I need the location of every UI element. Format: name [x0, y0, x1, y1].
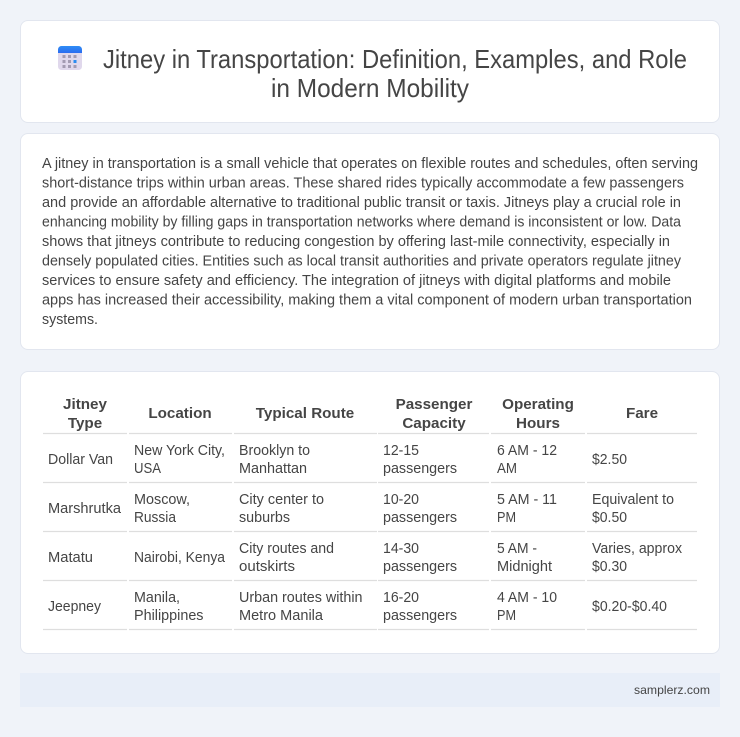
table row: Jeepney: Philippines [134, 608, 204, 624]
table row: Dollar Van: 6 AM - 12 [497, 443, 557, 459]
text block: description: enhancing mobility by filling gaps in transportation networks where demand is inconsistent or low. Data [42, 214, 681, 230]
table header row: Capacity [402, 415, 466, 432]
table row: Dollar Van: passengers [383, 461, 457, 477]
table row: Dollar Van: USA [134, 461, 161, 477]
table header row: Operating [502, 396, 574, 413]
text block: description: short-distance trips within urban areas. These shared rides typically accommodate a few passengers [42, 176, 684, 192]
table row: Jeepney: Metro Manila [239, 608, 323, 624]
table row: Dollar Van: 12-15 [383, 443, 419, 459]
table row: Jeepney: Jeepney [48, 599, 102, 615]
table row: Jeepney: passengers [383, 608, 457, 624]
table row: Dollar Van: $2.50 [592, 452, 627, 468]
icon: calendar [58, 46, 82, 70]
table header row: Location [148, 405, 212, 422]
table header row: Jitney [63, 396, 107, 413]
text block: description: A jitney in transportation is a small vehicle that operates on flexible routes and schedules, often serving [42, 156, 698, 172]
table row: Jeepney: Urban routes within [239, 590, 362, 606]
table header row: Fare [626, 405, 658, 422]
table row: Matatu: passengers [383, 559, 457, 575]
table row: Dollar Van: New York City, [134, 443, 225, 459]
table row: Jeepney: Manila, [134, 590, 180, 606]
table row: Jeepney: 16-20 [383, 590, 419, 606]
table header row: Typical Route [256, 405, 354, 422]
table row: Dollar Van [48, 443, 627, 477]
table header row: Hours [516, 415, 560, 432]
table row: Marshrutka: City center to [239, 492, 324, 508]
table row: Matatu: Midnight [497, 559, 552, 575]
table row: Marshrutka: Russia [134, 510, 176, 526]
table row: Matatu: outskirts [239, 559, 295, 575]
text block: description: services to ensure safety and efficiency. The integration of jitneys with digital platforms and mobile [42, 273, 671, 289]
table row dividers [43, 434, 697, 630]
table row: Marshrutka: Equivalent to [592, 492, 674, 508]
table row: Marshrutka: $0.50 [592, 510, 627, 526]
text block: description: densely populated cities. Entities such as local transit authorities and private operators regulate jitney [42, 254, 682, 270]
table row: Matatu: Varies, approx [592, 541, 683, 557]
table row: Dollar Van: Manhattan [239, 461, 307, 477]
text block: description: shows that jitneys contribute to reducing congestion by offering last-mile connectivity, especially in [42, 234, 670, 250]
table row: Jeepney [48, 590, 667, 624]
table row: Matatu: City routes and [239, 541, 334, 557]
table row: Marshrutka: PM [497, 510, 516, 526]
panel: title card [20, 20, 720, 123]
table row: Jeepney: $0.20-$0.40 [592, 599, 667, 615]
table row: Marshrutka: Moscow, [134, 492, 190, 508]
table row: Dollar Van: AM [497, 461, 517, 477]
title: in Modern Mobility [271, 75, 469, 103]
table row: Marshrutka: passengers [383, 510, 457, 526]
table row: Marshrutka: 10-20 [383, 492, 419, 508]
table row: Marshrutka [48, 492, 674, 526]
panel: description card [20, 133, 720, 350]
footer credit: samplerz.com [634, 683, 710, 697]
table row: Matatu: 5 AM - [497, 541, 537, 557]
table row: Dollar Van: Brooklyn to [239, 443, 310, 459]
table row: Marshrutka: Marshrutka [48, 501, 121, 517]
table row: Dollar Van: Dollar Van [48, 452, 113, 468]
title [103, 46, 687, 103]
table row: Marshrutka: 5 AM - 11 [497, 492, 557, 508]
table row: Matatu: Matatu [48, 550, 93, 566]
text block: description: systems. [42, 312, 98, 328]
panel: table card [20, 371, 720, 654]
table row: Matatu: 14-30 [383, 541, 419, 557]
panel: footer bar [20, 673, 720, 707]
table: jitney types [43, 396, 697, 630]
table header row: Passenger [396, 396, 473, 413]
table header row: Type [68, 415, 102, 432]
table row: Matatu [48, 541, 683, 575]
table header row [63, 396, 658, 432]
title: Jitney in Transportation: Definition, Examples, and Role [103, 46, 687, 74]
table row: Jeepney: 4 AM - 10 [497, 590, 557, 606]
table row: Marshrutka: suburbs [239, 510, 290, 526]
table row: Matatu: Nairobi, Kenya [134, 550, 225, 566]
text block: description [42, 156, 698, 328]
text block: description: and provide an affordable alternative to traditional public transit or taxis. Jitneys play a crucial role in [42, 195, 681, 211]
table row: Jeepney: PM [497, 608, 516, 624]
text block: description: apps has increased their accessibility, making them a vital component of modern urban transportation [42, 292, 692, 308]
table row: Matatu: $0.30 [592, 559, 627, 575]
